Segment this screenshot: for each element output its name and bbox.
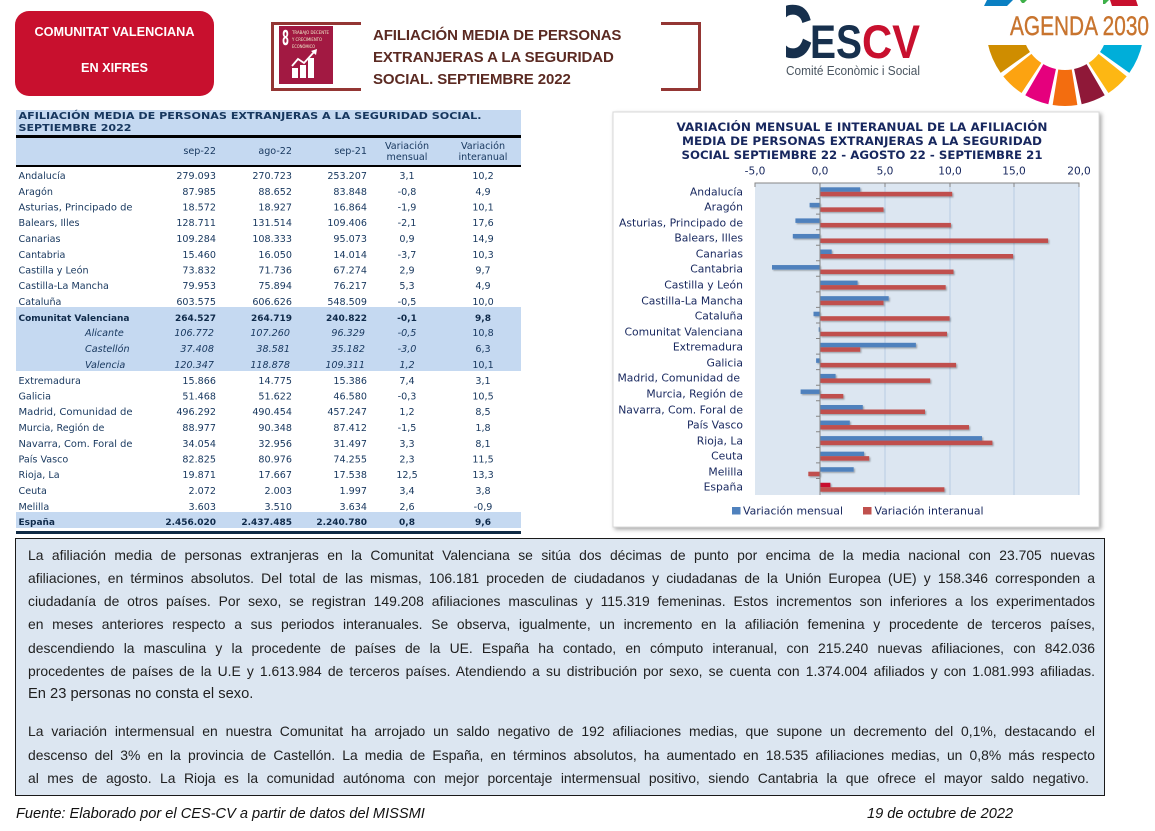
category labels: Rioja, La (697, 434, 743, 448)
row: Castilla-La Mancha: Castilla-La Mancha (18, 281, 109, 292)
paragraph 1: La afiliación media de personas extranjeras en la Comunitat Valenciana se sitúa dos décimas de punto por encima de la media nacional con 23.705 nuevas (28, 547, 1095, 563)
row: Aragón (18, 186, 491, 198)
row: Valencia: 10,1 (472, 360, 494, 371)
row: Castellón: 6,3 (475, 344, 491, 355)
badge: Comunitat Valenciana en xifres: EN XIFRES (81, 61, 148, 75)
row: Rioja: 13,3 (472, 470, 494, 481)
logo: CES-CV (771, 0, 921, 78)
row: España: 0,8 (399, 518, 415, 528)
row: Galicia: 51.468 (182, 392, 216, 402)
row: Andalucía (18, 170, 494, 182)
row: Castilla y León: 9,7 (475, 266, 491, 276)
row: Extremadura: 14.775 (258, 376, 292, 387)
row: Castellón: 35.182 (331, 344, 365, 355)
row: Canarias: 108.333 (252, 234, 292, 245)
row: Extremadura (18, 376, 491, 387)
category labels: Asturias, Principado de (619, 216, 743, 230)
row: Alicante: 96.329 (331, 328, 365, 339)
row: Cataluña: 603.575 (176, 297, 216, 308)
paragraph 1: afiliaciones, en términos absolutos. Del total de las mismas, 106.181 proceden de ciudadanos y ciudadanas de la Unión Europea (UE) y 158.346 corresponden a (28, 570, 1095, 586)
row: Canarias: 0,9 (399, 234, 415, 245)
paragraph 2: al mes de agosto. La Rioja es la comunidad autónoma con mejor porcentaje intermensual positivo, siendo Cantabria la que ofrece el mayor saldo negativo. (28, 770, 1089, 786)
row: Asturias: 10,1 (472, 202, 494, 214)
date: 19 de octubre de 2022 (867, 806, 1013, 822)
row: Balears: 109.406 (327, 218, 367, 229)
row: Murcia: Murcia, Región de (18, 422, 104, 434)
row: Valencia: 118.878 (250, 360, 290, 371)
row: Madrid: 490.454 (252, 407, 292, 418)
row: Castilla y León: 71.736 (258, 266, 292, 276)
row: Castilla-La Mancha: 4,9 (475, 281, 491, 292)
row: Balears: 128.711 (176, 218, 216, 229)
row: Asturias: Asturias, Principado de (18, 202, 133, 214)
table header: Variación (385, 140, 429, 152)
category labels: Extremadura (673, 340, 743, 354)
row: Castilla-La Mancha: 76.217 (333, 281, 367, 292)
paragraph 1: descendiendo la masculina y la procedente de países de la UE. España ha contado, en cómputo interanual, con 215.240 nuevas afiliaciones, con 842.036 (28, 640, 1095, 656)
row: Valencia: 120.347 (174, 360, 215, 371)
x axis labels: -5,0 (745, 166, 766, 178)
row: Ceuta: 3,4 (399, 486, 415, 497)
category labels: Castilla-La Mancha (641, 294, 743, 308)
x axis labels: 10,0 (938, 166, 962, 178)
row: Castilla-La Mancha (18, 281, 491, 292)
row: País Vasco: 11,5 (472, 454, 494, 466)
row: Andalucía: 253.207 (327, 171, 367, 182)
category labels: Ceuta (711, 450, 743, 462)
row: Galicia (18, 392, 494, 402)
row: Melilla: Melilla (18, 502, 49, 513)
row: Navarra: 3,3 (399, 439, 415, 450)
text block: analysis (15, 538, 1105, 796)
row: Alicante: 10,8 (472, 328, 494, 339)
row: Alicante: Alicante (84, 328, 124, 339)
table title: AFILIACIÓN MEDIA DE PERSONAS EXTRANJERAS A LA SEGURIDAD SOCIAL. (18, 109, 482, 122)
row: Galicia: Galicia (18, 392, 51, 402)
row: Castellón: 38.581 (256, 344, 290, 355)
row: Valencia: 1,2 (399, 360, 415, 371)
row: Cataluña: -0,5 (398, 297, 416, 308)
row: Valencia: Valencia (85, 360, 125, 371)
row: Melilla: -0,9 (474, 502, 492, 513)
row: Balears (18, 218, 494, 229)
row: País Vasco: País Vasco (18, 454, 68, 466)
row: Castellón: Castellón (85, 343, 130, 355)
legend: Variación mensual (743, 504, 843, 518)
row: España: 2.437.485 (241, 518, 292, 528)
row: Rioja: 19.871 (182, 470, 216, 481)
row: España: 2.456.020 (165, 518, 216, 528)
row: Murcia: 90.348 (258, 423, 292, 434)
row: Comunitat Valenciana: -0,1 (397, 314, 417, 324)
row: Navarra: 8,1 (475, 439, 491, 450)
table header: interanual (459, 152, 507, 163)
row: Galicia: 46.580 (333, 392, 367, 402)
row: Castilla y León: Castilla y León (18, 264, 89, 276)
row: Valencia: 109.311 (325, 360, 365, 371)
icon: SDG 8 decent work and economic growth: Y CRECIMIENTO (291, 37, 322, 43)
source note: Fuente: Elaborado por el CES-CV a partir de datos del MISSMI (16, 806, 425, 822)
row: Comunitat Valenciana: 9,8 (475, 314, 491, 324)
row: Comunitat Valenciana: 240.822 (326, 314, 367, 324)
logo: Agenda 2030 ring (984, 0, 1149, 106)
row: Madrid: 1,2 (399, 407, 415, 418)
row: Madrid: 457.247 (327, 407, 367, 418)
row: Ceuta: 2.072 (189, 486, 216, 497)
row: Galicia: 51.622 (258, 392, 292, 402)
row: España (18, 518, 491, 528)
row: Extremadura: 7,4 (399, 376, 415, 387)
row: Valencia (85, 360, 494, 371)
x axis labels: 0,0 (812, 166, 829, 178)
category labels: Cataluña (695, 310, 743, 322)
category labels: Navarra, Com. Foral de (618, 404, 743, 416)
row: Cantabria (18, 250, 494, 261)
row: Comunitat Valenciana: 264.527 (175, 314, 216, 324)
logo: CES-CV: CV (862, 15, 921, 68)
bars: variación interanual (808, 192, 1048, 492)
row: Cantabria: 10,3 (472, 250, 494, 261)
icon: SDG 8 decent work and economic growth: 8 (282, 26, 289, 50)
x axis labels: 15,0 (1002, 166, 1026, 178)
row: País Vasco (18, 454, 494, 466)
row: Aragón: Aragón (18, 186, 53, 198)
bars: variación mensual (772, 187, 982, 487)
chart title: MEDIA DE PERSONAS EXTRANJERAS A LA SEGURIDAD (682, 134, 1042, 148)
table: afiliación by community (16, 109, 521, 534)
row: Melilla (18, 502, 492, 513)
paragraph 2 (28, 723, 1095, 786)
row: Cataluña: 10,0 (472, 297, 494, 308)
row: Andalucía: 10,2 (472, 171, 494, 182)
row: Extremadura: Extremadura (18, 376, 81, 387)
category labels: País Vasco (687, 418, 743, 432)
row: Castellón: -3,0 (398, 344, 416, 355)
x axis labels: 5,0 (877, 166, 894, 178)
row: Rioja: 12,5 (396, 470, 418, 481)
row: Murcia: 87.412 (333, 423, 367, 434)
row: Navarra: 32.956 (258, 439, 292, 450)
row: Asturias: 18.927 (258, 202, 292, 214)
table title: SEPTIEMBRE 2022 (18, 123, 132, 134)
row: Melilla: 3.603 (189, 502, 216, 513)
row: Balears: -2,1 (398, 218, 416, 229)
row: Canarias (18, 234, 494, 245)
row: Aragón: -0,8 (398, 187, 416, 198)
heading: report title: AFILIACIÓN MEDIA DE PERSONAS (373, 27, 621, 44)
row: Asturias: -1,9 (398, 202, 416, 214)
category labels (617, 186, 743, 494)
paragraph 1: ciudadanía de otros países. Por sexo, se registran 149.208 afiliaciones masculinas y 115.319 femeninas. Estos incrementos son inferiores a los experimentados (28, 593, 1095, 609)
row: Murcia: -1,5 (398, 423, 416, 434)
row: Madrid: 8,5 (475, 407, 491, 418)
row: Melilla: 3.510 (265, 502, 292, 513)
row: Castilla-La Mancha: 75.894 (258, 281, 292, 292)
row: Canarias: 14,9 (472, 234, 494, 245)
row: Melilla: 2,6 (399, 502, 415, 513)
badge: Comunitat Valenciana en xifres (15, 11, 214, 96)
row: Ceuta (18, 486, 491, 497)
row: Ceuta: Ceuta (18, 486, 47, 497)
table title (18, 109, 482, 134)
row: Extremadura: 3,1 (475, 376, 491, 387)
paragraph 1 (28, 547, 1095, 702)
row: Balears: 131.514 (252, 218, 292, 229)
row: Rioja: 17.667 (258, 470, 292, 481)
panel: bar chart of monthly and annual variation (612, 110, 1104, 532)
row: Canarias: Canarias (18, 234, 61, 245)
row: España: España (18, 518, 55, 528)
row: Cataluña: 548.509 (327, 297, 367, 308)
paragraph 1: procedentes de países de la U.E y 1.613.984 de terceros países. Atendiendo a su distribución por sexo, se cuenta con 1.374.004 afiliados y con 1.081.993 afiliadas. (28, 663, 1095, 679)
table header: ago-22 (258, 146, 292, 157)
row: Cataluña (18, 297, 494, 308)
row: País Vasco: 74.255 (333, 454, 367, 466)
paragraph 1: en meses anteriores respecto a sus periodos interanuales. Se observa, igualmente, un incremento en la afiliación femenina y procedente de terceros países, (28, 616, 1095, 632)
category labels: Aragón (704, 200, 743, 214)
chart title: SOCIAL SEPTIEMBRE 22 - AGOSTO 22 - SEPTIEMBRE 21 (682, 148, 1042, 162)
row: Aragón: 83.848 (333, 187, 367, 198)
row: España: 9,6 (475, 518, 491, 528)
category labels: Castilla y León (664, 278, 743, 292)
badge: Comunitat Valenciana en xifres: COMUNITAT VALENCIANA (34, 25, 194, 39)
row: Melilla: 3.634 (340, 502, 367, 513)
category labels: Melilla (708, 466, 743, 478)
row: Navarra: 34.054 (182, 439, 216, 450)
row: España: 2.240.780 (316, 518, 367, 528)
row: Andalucía: 279.093 (176, 171, 216, 182)
row: Castellón: 37.408 (180, 344, 214, 355)
row: Comunitat Valenciana (18, 314, 491, 324)
row: Canarias: 109.284 (176, 234, 216, 245)
row: Extremadura: 15.386 (333, 376, 367, 387)
row: Castilla y León: 2,9 (399, 266, 415, 276)
row: Galicia: -0,3 (398, 392, 416, 402)
icon: SDG 8 decent work and economic growth (279, 26, 333, 84)
table header: sep-22 (183, 146, 216, 157)
row: Navarra: 31.497 (333, 439, 367, 450)
row: Alicante (84, 328, 494, 339)
legend (732, 504, 984, 518)
vertical zero axis (816, 183, 820, 495)
row: Madrid: 496.292 (176, 407, 216, 418)
row: Rioja: 17.538 (333, 470, 367, 481)
row: País Vasco: 2,3 (399, 454, 415, 466)
row: Alicante: 107.260 (250, 328, 290, 339)
row: Cantabria: 15.460 (182, 250, 216, 261)
row: Andalucía: 270.723 (252, 171, 292, 182)
row: Aragón: 88.652 (258, 187, 292, 198)
row: Castilla y León: 73.832 (182, 266, 216, 276)
plot background and grid (755, 183, 1079, 495)
row: Castellón (85, 343, 491, 355)
row: Navarra (18, 439, 491, 450)
logo: CES-CV: ES (810, 15, 862, 68)
category labels: Andalucía (690, 186, 743, 198)
row: Andalucía: Andalucía (18, 170, 66, 182)
legend: Variación interanual (874, 504, 984, 518)
row: Ceuta: 1.997 (340, 486, 367, 497)
category labels: Madrid, Comunidad de (617, 372, 740, 384)
row: Cantabria: 14.014 (333, 250, 367, 261)
row: Asturias (18, 202, 494, 214)
chart title (676, 119, 1048, 162)
paragraph 2: La variación intermensual en nuestra Comunitat ha arrojado un saldo negativo de 192 afiliaciones medias, que supone un decremento del 0,1%, destacando el (28, 723, 1095, 739)
row: Ceuta: 3,8 (475, 486, 491, 497)
row: Navarra: Navarra, Com. Foral de (18, 439, 133, 450)
row: Alicante: 106.772 (174, 328, 214, 339)
row: Cataluña: 606.626 (252, 297, 292, 308)
row: Andalucía: 3,1 (399, 171, 415, 182)
row: Castilla y León (18, 264, 491, 276)
category labels: Balears, Illes (674, 232, 743, 244)
chart title: VARIACIÓN MENSUAL E INTERANUAL DE LA AFILIACIÓN (676, 119, 1048, 134)
row: Castilla-La Mancha: 79.953 (182, 281, 216, 292)
row: Extremadura: 15.866 (182, 376, 216, 387)
row: Cantabria: 16.050 (258, 250, 292, 261)
heading: report title: EXTRANJERAS A LA SEGURIDAD (373, 49, 614, 66)
paragraph 2: descenso del 3% en la provincia de Castellón. La media de España, en términos absolutos, ha aumentado en 18.535 afiliaciones medias, un 0,8% más respecto (28, 747, 1095, 763)
row: País Vasco: 82.825 (182, 454, 216, 466)
row: Balears: Balears, Illes (18, 218, 80, 229)
row: Comunitat Valenciana: Comunitat Valenciana (18, 314, 130, 324)
row: Cataluña: Cataluña (18, 297, 61, 308)
row: Alicante: -0,5 (398, 328, 416, 339)
category labels: Murcia, Región de (646, 388, 743, 400)
row: Murcia (18, 422, 491, 434)
row: Madrid: Madrid, Comunidad de (18, 407, 133, 418)
heading: report title: SOCIAL. SEPTIEMBRE 2022 (373, 71, 571, 88)
table header: Variación (461, 140, 505, 152)
row: Cantabria: -3,7 (398, 250, 416, 261)
row: Rioja: Rioja, La (18, 470, 60, 481)
row: Galicia: 10,5 (472, 392, 494, 402)
row: País Vasco: 80.976 (258, 454, 292, 466)
heading: report title (373, 26, 621, 88)
table header (183, 140, 507, 163)
row: Balears: 17,6 (472, 218, 494, 229)
row: Murcia: 88.977 (182, 423, 216, 434)
row: Cantabria: Cantabria (18, 250, 65, 261)
x axis labels (745, 166, 1091, 178)
x axis labels: 20,0 (1067, 166, 1091, 178)
category labels: Canarias (696, 248, 743, 260)
row: Madrid (18, 407, 491, 418)
row: Asturias: 16.864 (333, 202, 367, 214)
table header: mensual (387, 152, 427, 163)
table header: sep-21 (334, 146, 367, 157)
category labels: Galicia (706, 356, 743, 370)
icon: SDG 8 decent work and economic growth: ECONÓMICO (292, 43, 315, 50)
row: Aragón: 87.985 (182, 187, 216, 198)
row: Canarias: 95.073 (333, 234, 367, 245)
category labels: Cantabria (690, 262, 743, 276)
row: Asturias: 18.572 (182, 202, 216, 214)
row: Rioja (18, 470, 494, 481)
row: Comunitat Valenciana: 264.719 (251, 314, 292, 324)
row: Castilla-La Mancha: 5,3 (399, 281, 415, 292)
row: Aragón: 4,9 (475, 187, 491, 198)
row: Castilla y León: 67.274 (333, 266, 367, 276)
row: Murcia: 1,8 (475, 423, 491, 434)
row: Ceuta: 2.003 (265, 486, 292, 497)
paragraph 1: En 23 personas no consta el sexo. (28, 686, 253, 702)
category labels: España (704, 480, 743, 494)
title bracket frame (271, 22, 701, 91)
category labels: Comunitat Valenciana (624, 326, 743, 338)
